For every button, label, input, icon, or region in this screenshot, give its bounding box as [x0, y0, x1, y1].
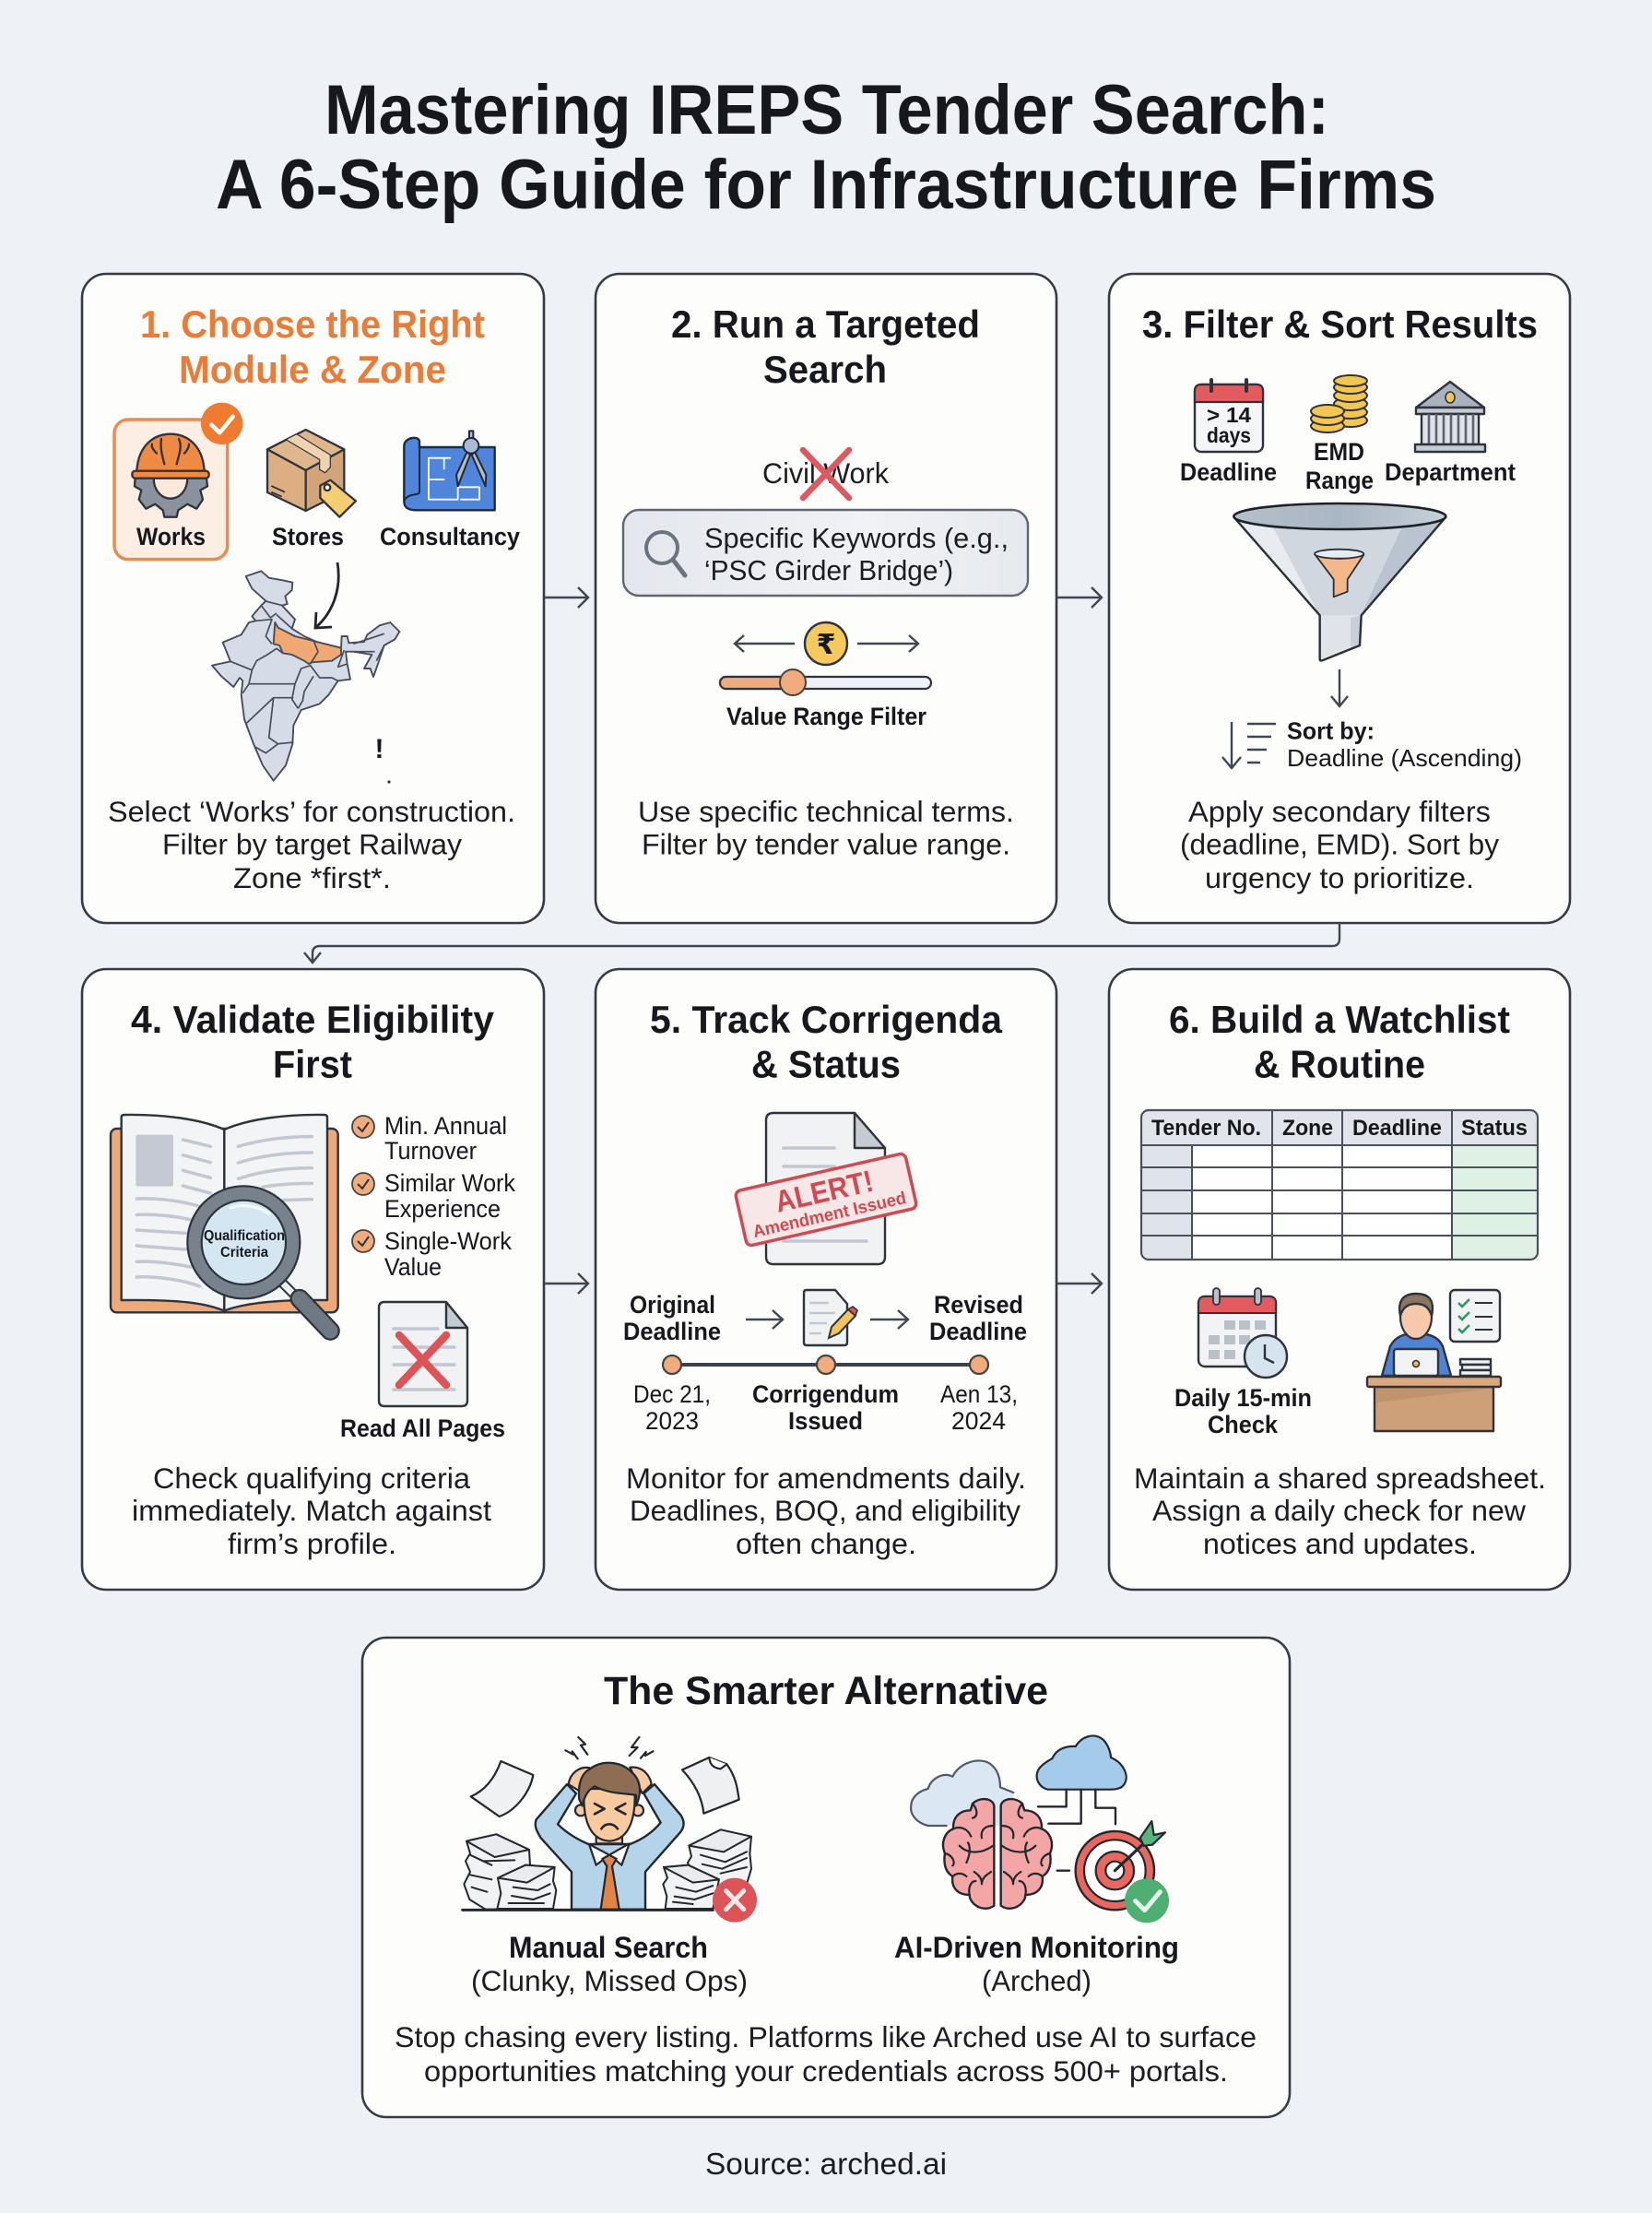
body text: step 4: firm’s profile. — [228, 1527, 396, 1560]
arrow: step 1 to step 2 — [544, 587, 588, 608]
arrow: step 3 down to step 4 — [304, 923, 1339, 963]
icon: stressed man manual search — [463, 1737, 757, 1923]
body text: step 3 — [1180, 795, 1499, 894]
icon: document with alert stamp: ALERT! — [772, 1164, 877, 1219]
icon: works selected — [114, 403, 242, 560]
arrow: funnel to sort — [1331, 669, 1348, 706]
body text: step 6: notices and updates. — [1203, 1527, 1477, 1560]
heading: step 1: Module & Zone — [179, 348, 446, 391]
panel: step 6 watchlist and routine — [1109, 969, 1570, 1590]
arrow: step 2 to step 3 — [1056, 587, 1102, 608]
icon: deadline calendar: days — [1207, 423, 1251, 447]
checklist: qualification criteria: Value — [384, 1253, 442, 1281]
icon: person at desk — [1367, 1290, 1501, 1431]
heading: step 4: First — [273, 1043, 352, 1086]
heading: smarter alternative: The Smarter Alternative — [604, 1670, 1048, 1713]
body text: step 5 — [626, 1462, 1026, 1560]
body text: step 6: Maintain a shared spreadsheet. — [1134, 1462, 1546, 1495]
timeline: corrigendum dates — [623, 1290, 1027, 1435]
sort by label — [1222, 717, 1522, 772]
timeline: corrigendum dates: Dec 21, — [633, 1380, 711, 1408]
body text: step 1 — [108, 795, 515, 894]
panel: step 5 corrigenda and status — [596, 969, 1056, 1590]
heading: step 2 — [671, 302, 980, 391]
icon: deadline calendar — [1180, 380, 1277, 486]
search box — [623, 510, 1028, 596]
icon: daily check calendar and clock: Daily 15-min — [1174, 1384, 1312, 1412]
label: AI-driven monitoring — [894, 1931, 1179, 1997]
checklist: qualification criteria — [352, 1112, 515, 1281]
icon: stores box: Stores — [272, 523, 344, 550]
heading: step 6: & Routine — [1254, 1043, 1425, 1086]
checklist: qualification criteria: Min. Annual — [384, 1112, 507, 1140]
search box: ‘PSC Girder Bridge’) — [704, 555, 953, 586]
body text: step 4: Check qualifying criteria — [153, 1462, 470, 1495]
map of India with highlighted zone — [212, 571, 399, 781]
icon: document with red cross: Read All Pages — [340, 1414, 505, 1442]
timeline: corrigendum dates: Aen 13, — [940, 1380, 1018, 1408]
icon: document with red cross — [340, 1302, 505, 1442]
icon: department building — [1385, 382, 1516, 486]
body text: step 3: (deadline, EMD). Sort by — [1180, 828, 1499, 861]
timeline: corrigendum dates: Issued — [788, 1407, 863, 1435]
icon: consultancy blueprint: Consultancy — [380, 523, 520, 550]
icon: stores box — [267, 430, 356, 550]
checklist: qualification criteria: Turnover — [384, 1137, 477, 1165]
stray exclamation mark: ! — [374, 734, 384, 764]
heading: step 5: & Status — [751, 1043, 901, 1086]
body text: smarter alternative: opportunities matching your credentials across 500+ portals. — [424, 2054, 1228, 2088]
arrow: to zone map — [315, 562, 338, 628]
body text: step 5: Deadlines, BOQ, and eligibility — [630, 1494, 1021, 1527]
arrow: step 4 to step 5 — [544, 1273, 588, 1294]
label: manual search: Manual Search — [509, 1931, 708, 1964]
timeline: corrigendum dates: Deadline — [929, 1318, 1027, 1345]
arrow: step 5 to step 6 — [1056, 1273, 1102, 1294]
timeline: corrigendum dates: 2023 — [645, 1407, 699, 1435]
panel: the smarter alternative — [362, 1638, 1290, 2117]
body text: smarter alternative — [395, 2020, 1257, 2088]
body text: step 3: urgency to prioritize. — [1205, 861, 1474, 894]
label: manual search — [471, 1931, 748, 1997]
body text: step 1: Filter by target Railway — [162, 828, 462, 861]
icon: funnel — [1233, 503, 1446, 660]
checklist: qualification criteria: Single-Work — [384, 1227, 512, 1255]
icon: daily check calendar and clock — [1174, 1288, 1312, 1438]
heading: step 6: 6. Build a Watchlist — [1169, 998, 1510, 1041]
source line: Source: arched.ai — [705, 2147, 947, 2181]
icon: deadline calendar: Deadline — [1180, 458, 1277, 486]
body text: step 5: Monitor for amendments daily. — [626, 1462, 1026, 1495]
icon: open book with magnifier: Criteria — [220, 1245, 268, 1260]
label: AI-driven monitoring: AI-Driven Monitoring — [894, 1931, 1179, 1964]
heading: step 4: 4. Validate Eligibility — [131, 998, 494, 1041]
watchlist table: Zone — [1282, 1116, 1333, 1141]
panel: step 1 choose module and zone — [82, 274, 544, 923]
heading: step 2: Search — [763, 348, 887, 391]
checklist: qualification criteria: Similar Work — [384, 1169, 515, 1197]
body text: step 2 — [638, 795, 1014, 861]
body text: step 1: Zone *first*. — [233, 861, 391, 894]
sort by label: Deadline (Ascending) — [1287, 744, 1522, 772]
title — [216, 71, 1436, 224]
panel: step 4 validate eligibility — [82, 969, 544, 1590]
timeline: corrigendum dates: 2024 — [951, 1407, 1006, 1435]
timeline: corrigendum dates: Original — [630, 1291, 715, 1319]
label: AI-driven monitoring: (Arched) — [982, 1964, 1092, 1997]
heading: step 2: 2. Run a Targeted — [671, 302, 980, 346]
icon: document with alert stamp — [735, 1113, 917, 1264]
timeline: corrigendum dates: Corrigendum — [752, 1380, 899, 1408]
body text: step 4: immediately. Match against — [132, 1494, 491, 1527]
icon: deadline calendar: > 14 — [1207, 403, 1251, 427]
icon: open book with magnifier: Qualification — [204, 1228, 285, 1244]
heading: step 1: 1. Choose the Right — [140, 302, 485, 346]
icon: EMD coins: EMD — [1314, 438, 1364, 466]
icon: EMD coins — [1305, 375, 1374, 494]
heading: step 4 — [131, 998, 494, 1086]
icon: document with alert stamp: Amendment Issued — [751, 1189, 908, 1242]
body text: step 5: often change. — [736, 1527, 916, 1560]
heading: step 1 — [140, 302, 485, 391]
title: Mastering IREPS Tender Search: — [324, 71, 1329, 149]
title: A 6-Step Guide for Infrastructure Firms — [216, 146, 1436, 224]
icon: works selected: Works — [136, 523, 206, 550]
checklist: qualification criteria: Experience — [384, 1195, 501, 1223]
panel: step 2 targeted search — [596, 274, 1056, 923]
icon: brain cloud and target AI monitoring — [911, 1735, 1169, 1923]
icon: open book with magnifier — [111, 1115, 338, 1331]
heading: step 3: 3. Filter & Sort Results — [1142, 302, 1538, 346]
body text: step 2: Use specific technical terms. — [638, 795, 1014, 828]
icon: EMD coins: Range — [1305, 467, 1374, 494]
heading: step 5 — [650, 998, 1003, 1086]
icon: department building: Department — [1385, 458, 1516, 486]
icon: daily check calendar and clock: Check — [1208, 1411, 1279, 1438]
body text: smarter alternative: Stop chasing every listing. Platforms like Arched use AI to surface — [395, 2020, 1257, 2053]
watchlist table: Status — [1461, 1116, 1528, 1141]
panel: step 3 filter and sort — [1109, 274, 1570, 923]
value range slider: ₹ — [817, 629, 835, 661]
timeline: corrigendum dates: Deadline — [623, 1318, 721, 1345]
sort by label: Sort by: — [1287, 717, 1375, 745]
body text: step 6 — [1134, 1462, 1546, 1560]
value range slider: Value Range Filter — [726, 703, 926, 730]
body text: step 2: Filter by tender value range. — [642, 828, 1010, 861]
body text: step 1: Select ‘Works’ for construction. — [108, 795, 515, 828]
watchlist table — [1141, 1110, 1538, 1260]
timeline: corrigendum dates: Revised — [934, 1291, 1023, 1319]
value range slider — [720, 622, 931, 730]
watchlist table: Deadline — [1352, 1116, 1442, 1141]
watchlist table: Tender No. — [1151, 1116, 1261, 1141]
heading: step 6 — [1169, 998, 1510, 1086]
body text: step 4 — [132, 1462, 491, 1560]
icon: consultancy blueprint — [380, 431, 520, 550]
stray exclamation mark — [374, 734, 391, 784]
crossed out generic term: Civil Work — [762, 456, 889, 490]
crossed out generic term — [762, 450, 889, 498]
body text: step 3: Apply secondary filters — [1188, 795, 1491, 828]
body text: step 6: Assign a daily check for new — [1152, 1494, 1526, 1527]
heading: step 5: 5. Track Corrigenda — [650, 998, 1003, 1041]
label: manual search: (Clunky, Missed Ops) — [471, 1964, 748, 1997]
search box: Specific Keywords (e.g., — [704, 523, 1009, 554]
